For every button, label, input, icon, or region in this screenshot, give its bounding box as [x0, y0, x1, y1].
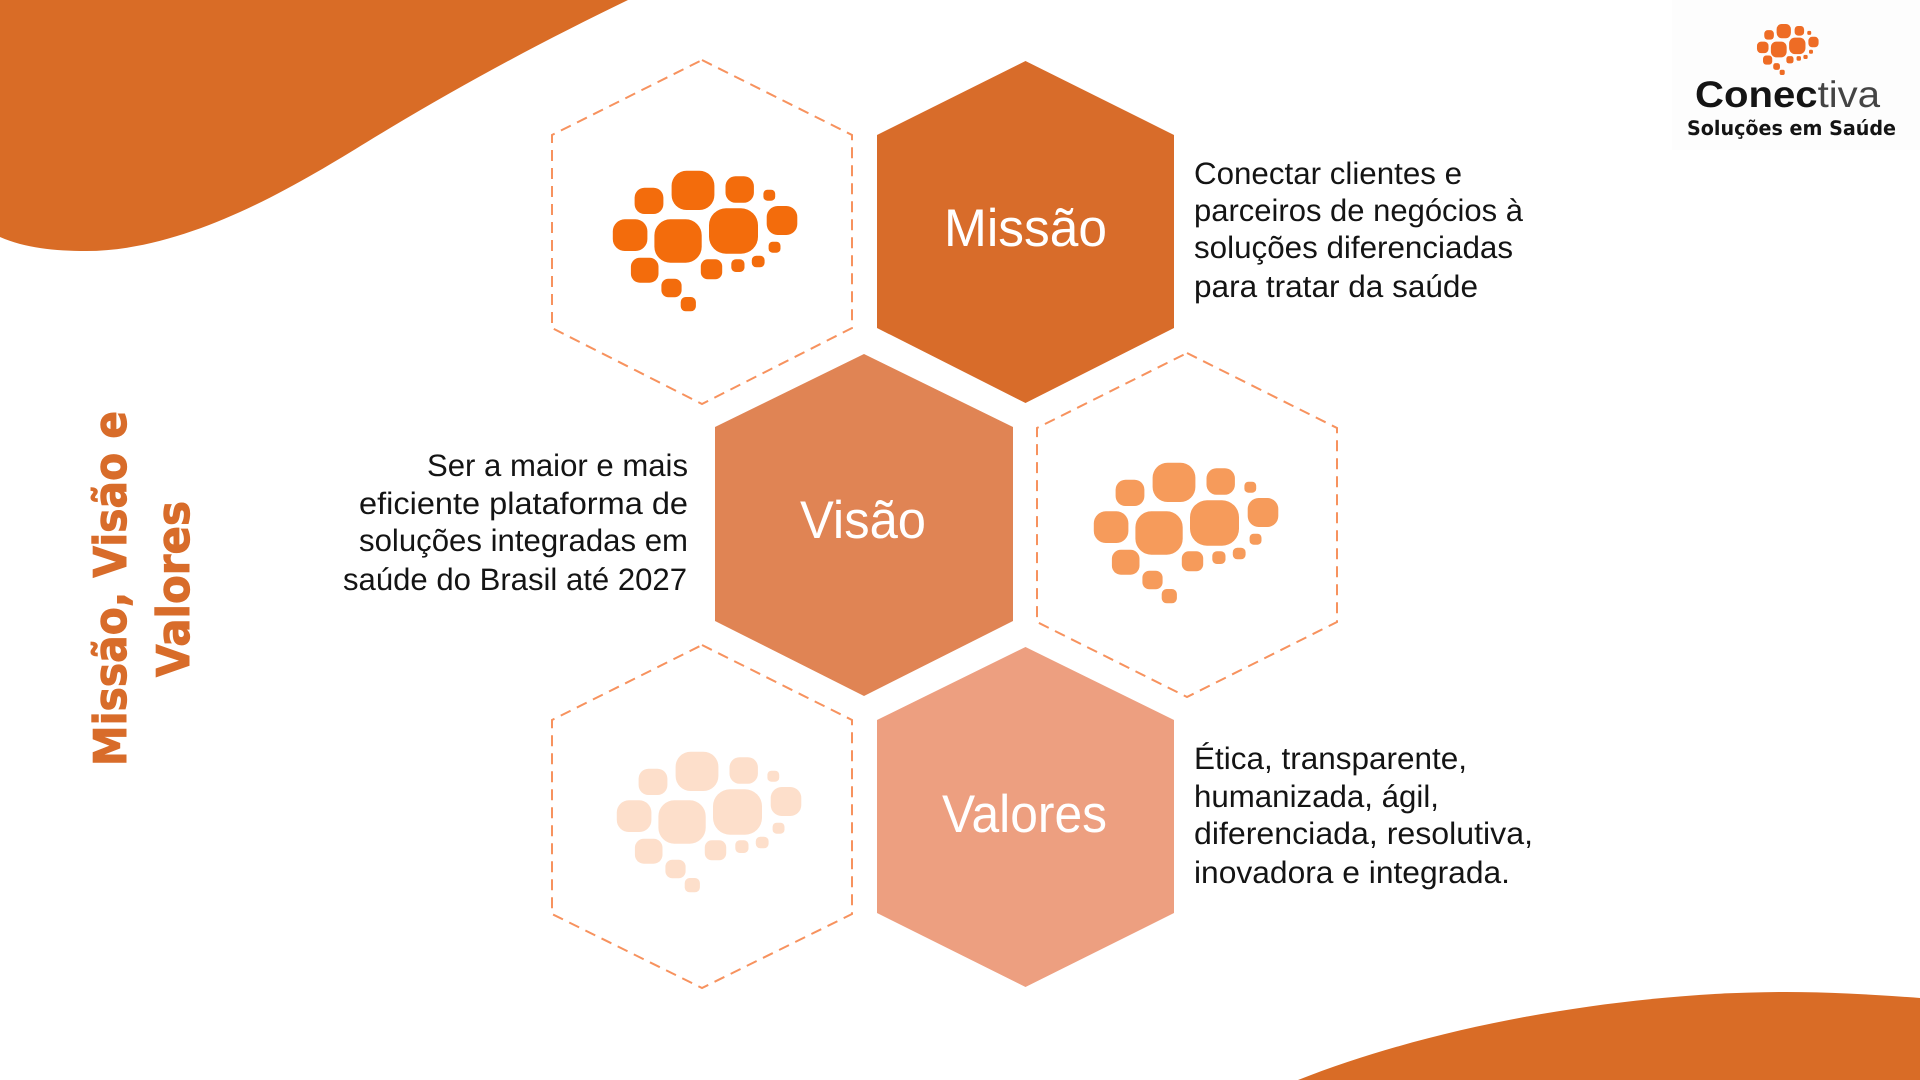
icon: brain dark orange: [613, 171, 797, 311]
panel: dashed hexagon with brain icon, bottom: [552, 645, 852, 988]
panel: Missão hexagon: [877, 61, 1174, 403]
text block: vision statement: eficiente plataforma de: [359, 486, 688, 521]
text block: values statement: [1194, 741, 1533, 890]
title: rotated heading: Valores: [147, 501, 200, 677]
logo wordmark: Conec tiva: [1695, 74, 1880, 115]
icon: logo brain: [1757, 24, 1819, 75]
logo: Conectiva: [1672, 0, 1920, 150]
text block: mission statement: soluções diferenciadas: [1194, 230, 1513, 265]
icon: brain medium orange: [1094, 463, 1278, 603]
text block: vision statement: Ser a maior e mais: [427, 448, 688, 483]
title: rotated heading: [84, 411, 200, 766]
text block: mission statement: [1194, 156, 1524, 304]
text block: vision statement: soluções integradas em: [359, 523, 688, 558]
panel: Valores hexagon: [877, 647, 1174, 987]
heading: Missão: Missão: [944, 199, 1107, 258]
logo tagline: Soluções em Saúde: [1687, 116, 1896, 140]
text block: mission statement: Conectar clientes e: [1194, 156, 1462, 191]
text block: vision statement: saúde do Brasil até 2027: [343, 562, 687, 597]
text block: mission statement: parceiros de negócios à: [1194, 193, 1524, 228]
heading: Valores: Valores: [942, 785, 1107, 844]
text block: vision statement: [343, 448, 688, 597]
icon: brain pale orange: [617, 752, 801, 892]
bottom-right decorative wave: [1298, 992, 1920, 1080]
panel: Visão hexagon: [715, 354, 1013, 696]
panel: dashed hexagon with brain icon, middle: [1037, 353, 1337, 697]
heading: Visão: Visão: [800, 491, 926, 550]
top-left decorative wave: [0, 0, 628, 251]
text block: values statement: Ética, transparente,: [1194, 741, 1467, 776]
text block: mission statement: para tratar da saúde: [1194, 269, 1478, 304]
panel: dashed hexagon with brain icon, top: [552, 60, 852, 404]
text block: values statement: humanizada, ágil,: [1194, 779, 1439, 814]
title: rotated heading: Missão, Visão e: [84, 411, 137, 766]
text block: values statement: inovadora e integrada.: [1194, 855, 1510, 890]
text block: values statement: diferenciada, resolutiva,: [1194, 816, 1533, 851]
